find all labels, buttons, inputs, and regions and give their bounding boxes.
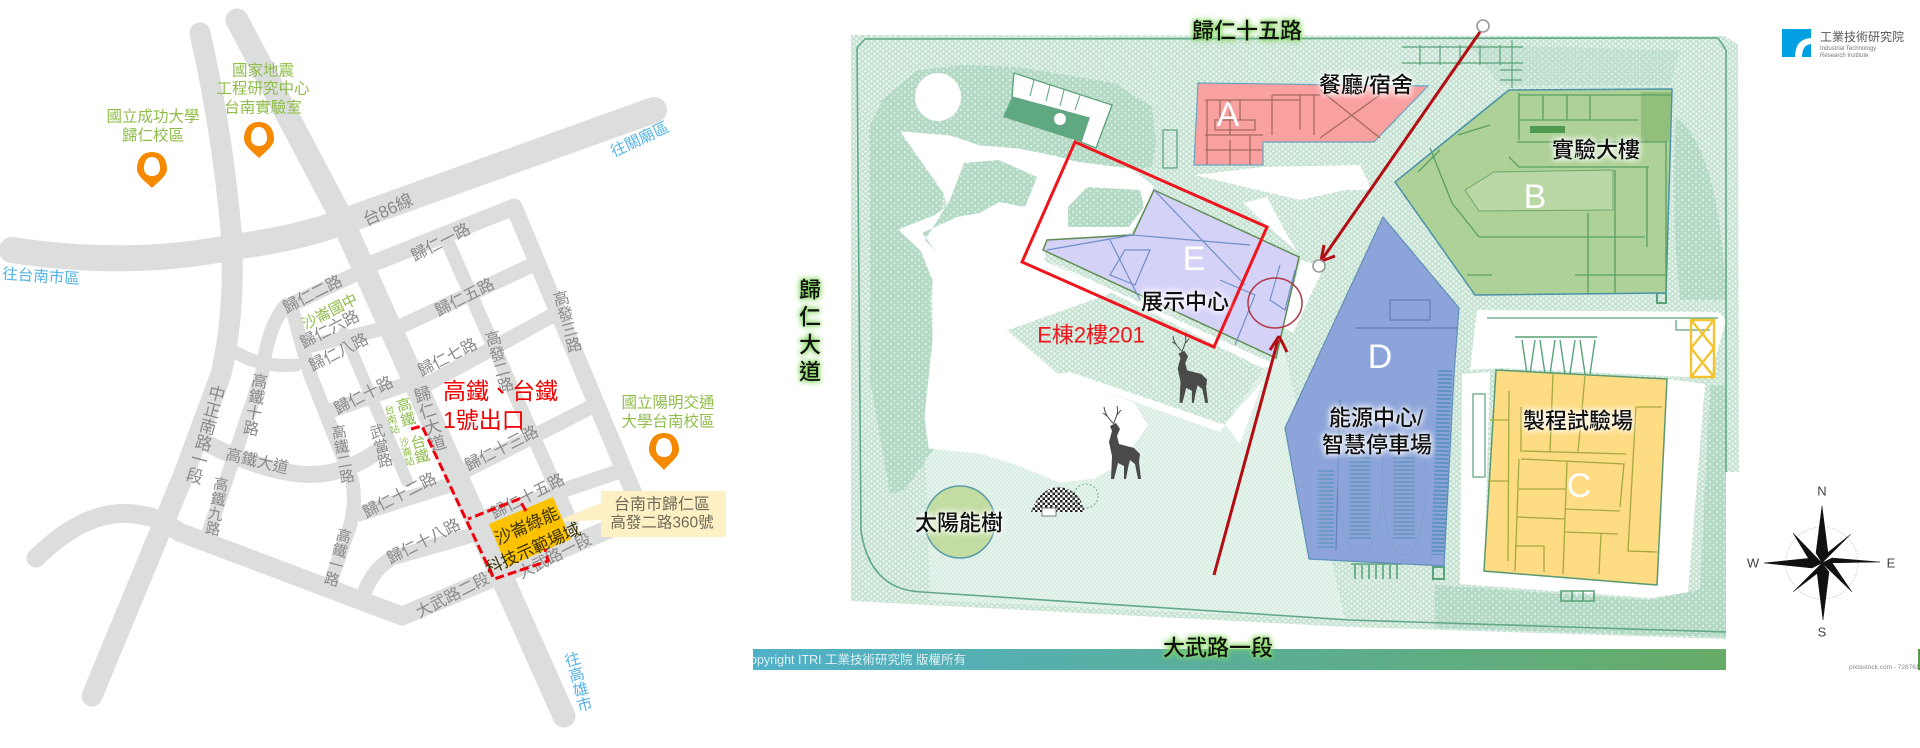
- building and road labels: 展示中心: [1141, 290, 1229, 314]
- direction labels: [2, 118, 672, 714]
- site ground: [851, 35, 1739, 639]
- road names: 歸仁十三路: [462, 422, 542, 475]
- site block: 科技示範場域: [483, 520, 583, 578]
- site boundary: [857, 38, 1726, 632]
- road names: 大武路二段: [413, 569, 493, 622]
- building and road labels: 智慧停車場: [1322, 432, 1432, 458]
- arrow: from south road: [1214, 336, 1287, 575]
- solar tree circle: [915, 486, 1003, 558]
- campus labels: 台南實驗室: [224, 98, 302, 116]
- arrow: from north road: [1319, 32, 1480, 262]
- building and road labels: 能源中心/: [1329, 406, 1424, 430]
- logo: ITRI: [1782, 29, 1904, 59]
- building D: [1285, 217, 1459, 566]
- road names: 高鐵二路: [328, 423, 356, 485]
- campus labels: 沙崙國中: [299, 291, 361, 333]
- direction labels: 往關廟區: [608, 118, 672, 161]
- station labels: 台鐵: [407, 432, 431, 467]
- road names: 中正南路一段: [182, 382, 227, 486]
- campus labels: 歸仁校區: [122, 126, 184, 144]
- green island: [922, 160, 1037, 253]
- highlight: entrance circle: [1248, 278, 1302, 328]
- logo: ITRI: 工業技術研究院: [1820, 29, 1904, 44]
- road names: 歸仁六路: [297, 307, 362, 352]
- direction labels: 往台南市區: [2, 265, 80, 288]
- edge bar: [1918, 649, 1920, 670]
- campus labels: 國立成功大學: [106, 106, 200, 126]
- road names: 高鐵大道: [224, 446, 290, 477]
- building and road labels: 歸: [799, 278, 821, 302]
- exit callout: 1號出口: [443, 407, 525, 433]
- road names: 高發二路: [481, 328, 515, 395]
- exit callout: 高鐵、台鐵: [443, 378, 558, 404]
- compass ring: [1786, 527, 1858, 599]
- building A: [1194, 83, 1428, 165]
- copyright bar: Copyright ITRI 工業技術研究院 版權所有: [741, 652, 966, 667]
- station labels: 高鐵: [393, 395, 417, 430]
- label: solar tree: 太陽能樹: [915, 510, 1003, 536]
- building and road labels: 大: [799, 332, 821, 358]
- road names: [182, 190, 595, 622]
- road names: 歸仁十路: [331, 373, 396, 418]
- highlight: red frame around E block: [1022, 142, 1267, 347]
- building and road labels: E棟2樓201: [1037, 322, 1145, 348]
- road names: 歸仁一路: [408, 220, 473, 265]
- campus labels: 國家地震: [232, 62, 294, 80]
- building and road labels: 仁: [799, 304, 821, 330]
- icon: orange pin, NCKU: [137, 152, 167, 188]
- road names: 歸仁大道: [409, 384, 448, 454]
- stock image credit: pixtastock.com - 728761: [1849, 664, 1920, 671]
- logo: ITRI: Research Institute: [1820, 53, 1869, 59]
- icon: yellow hatch structure: [1691, 320, 1714, 377]
- compass white backing: [1726, 472, 1918, 670]
- label: D: D: [1368, 338, 1392, 376]
- compass rose: S: [1818, 624, 1827, 640]
- address callout: 高發二路360號: [610, 514, 714, 532]
- compass rose: N: [1817, 484, 1827, 498]
- road names: 歸仁八路: [306, 330, 371, 375]
- direction labels: 往高雄市: [561, 649, 594, 714]
- compass rose: [1726, 472, 1918, 670]
- road names: 大武路一段: [515, 530, 595, 583]
- compass rose: W: [1747, 556, 1760, 570]
- campus labels: 工程研究中心: [216, 80, 310, 98]
- address callout: 台南市歸仁區: [614, 496, 710, 514]
- label: B: B: [1524, 178, 1546, 216]
- panel: location road map: [2, 20, 726, 716]
- arrow end marker: [1313, 260, 1325, 272]
- label: A: A: [1217, 96, 1240, 134]
- pond and open white ground: [901, 133, 1152, 481]
- label: E: E: [1183, 240, 1205, 278]
- road names: 歸仁七路: [415, 335, 480, 380]
- site block: 沙崙綠能: [492, 503, 562, 549]
- building and road labels: 餐廳/宿舍: [1319, 72, 1413, 98]
- road names: 武當路: [366, 422, 394, 470]
- icon: deer, rear: [1103, 406, 1141, 479]
- road names: 歸仁十五路: [488, 470, 568, 523]
- lower lawn texture: [925, 340, 1345, 620]
- round pond: [915, 73, 961, 121]
- building C: [1484, 370, 1667, 585]
- road names: 歸仁五路: [432, 275, 497, 320]
- station labels: 台南站: [380, 403, 400, 437]
- road names: 高鐵十路: [239, 371, 269, 437]
- road names: 歸仁二路: [280, 272, 345, 317]
- road names: 歸仁十二路: [360, 469, 440, 522]
- building and road labels: [799, 18, 1640, 458]
- cafeteria pavilion outbuilding: [1003, 73, 1112, 148]
- building and road labels: 歸仁十五路: [1192, 18, 1302, 44]
- address callout: [555, 491, 726, 537]
- building B: [1395, 89, 1672, 295]
- building and road labels: 道: [799, 360, 821, 384]
- exit callout: [443, 378, 558, 433]
- icon: orange pin, NYCU: [649, 433, 679, 470]
- road names: 高鐵一路: [321, 526, 353, 588]
- tree patch above building E: [1068, 187, 1144, 227]
- building and road labels: 實驗大樓: [1552, 138, 1640, 162]
- compass rose: E: [1887, 556, 1896, 570]
- label: south road: 大武路一段: [1163, 636, 1273, 660]
- logo: ITRI: Industrial Technology: [1820, 46, 1876, 52]
- road names: 高發三路: [549, 288, 583, 355]
- icon: orange pin, NCREE: [244, 122, 274, 158]
- tree mass: [869, 45, 1726, 637]
- white roads and service yards: [1043, 165, 1726, 598]
- icon: solar dome: [1031, 484, 1098, 516]
- road names: 歸仁十八路: [384, 515, 464, 568]
- red dashed route: [411, 426, 548, 579]
- station labels: 沙崙站: [396, 436, 415, 469]
- label: C: C: [1567, 467, 1591, 505]
- icon: deer, front: [1172, 335, 1208, 403]
- road network: [12, 20, 654, 716]
- campus labels: [106, 62, 715, 430]
- road names: 高鐵九路: [202, 475, 230, 537]
- copyright bar: [741, 649, 1726, 670]
- building E: [1043, 190, 1299, 358]
- building and road labels: 製程試驗場: [1523, 408, 1633, 434]
- campus labels: 大學台南校區: [621, 412, 715, 430]
- site furniture lines: [1163, 40, 1718, 601]
- campus labels: 國立陽明交通: [621, 394, 715, 412]
- panel: campus site plan: [741, 18, 1739, 670]
- station labels: [380, 395, 431, 469]
- arrow start marker: [1477, 20, 1489, 32]
- road names: 台86線: [360, 190, 416, 230]
